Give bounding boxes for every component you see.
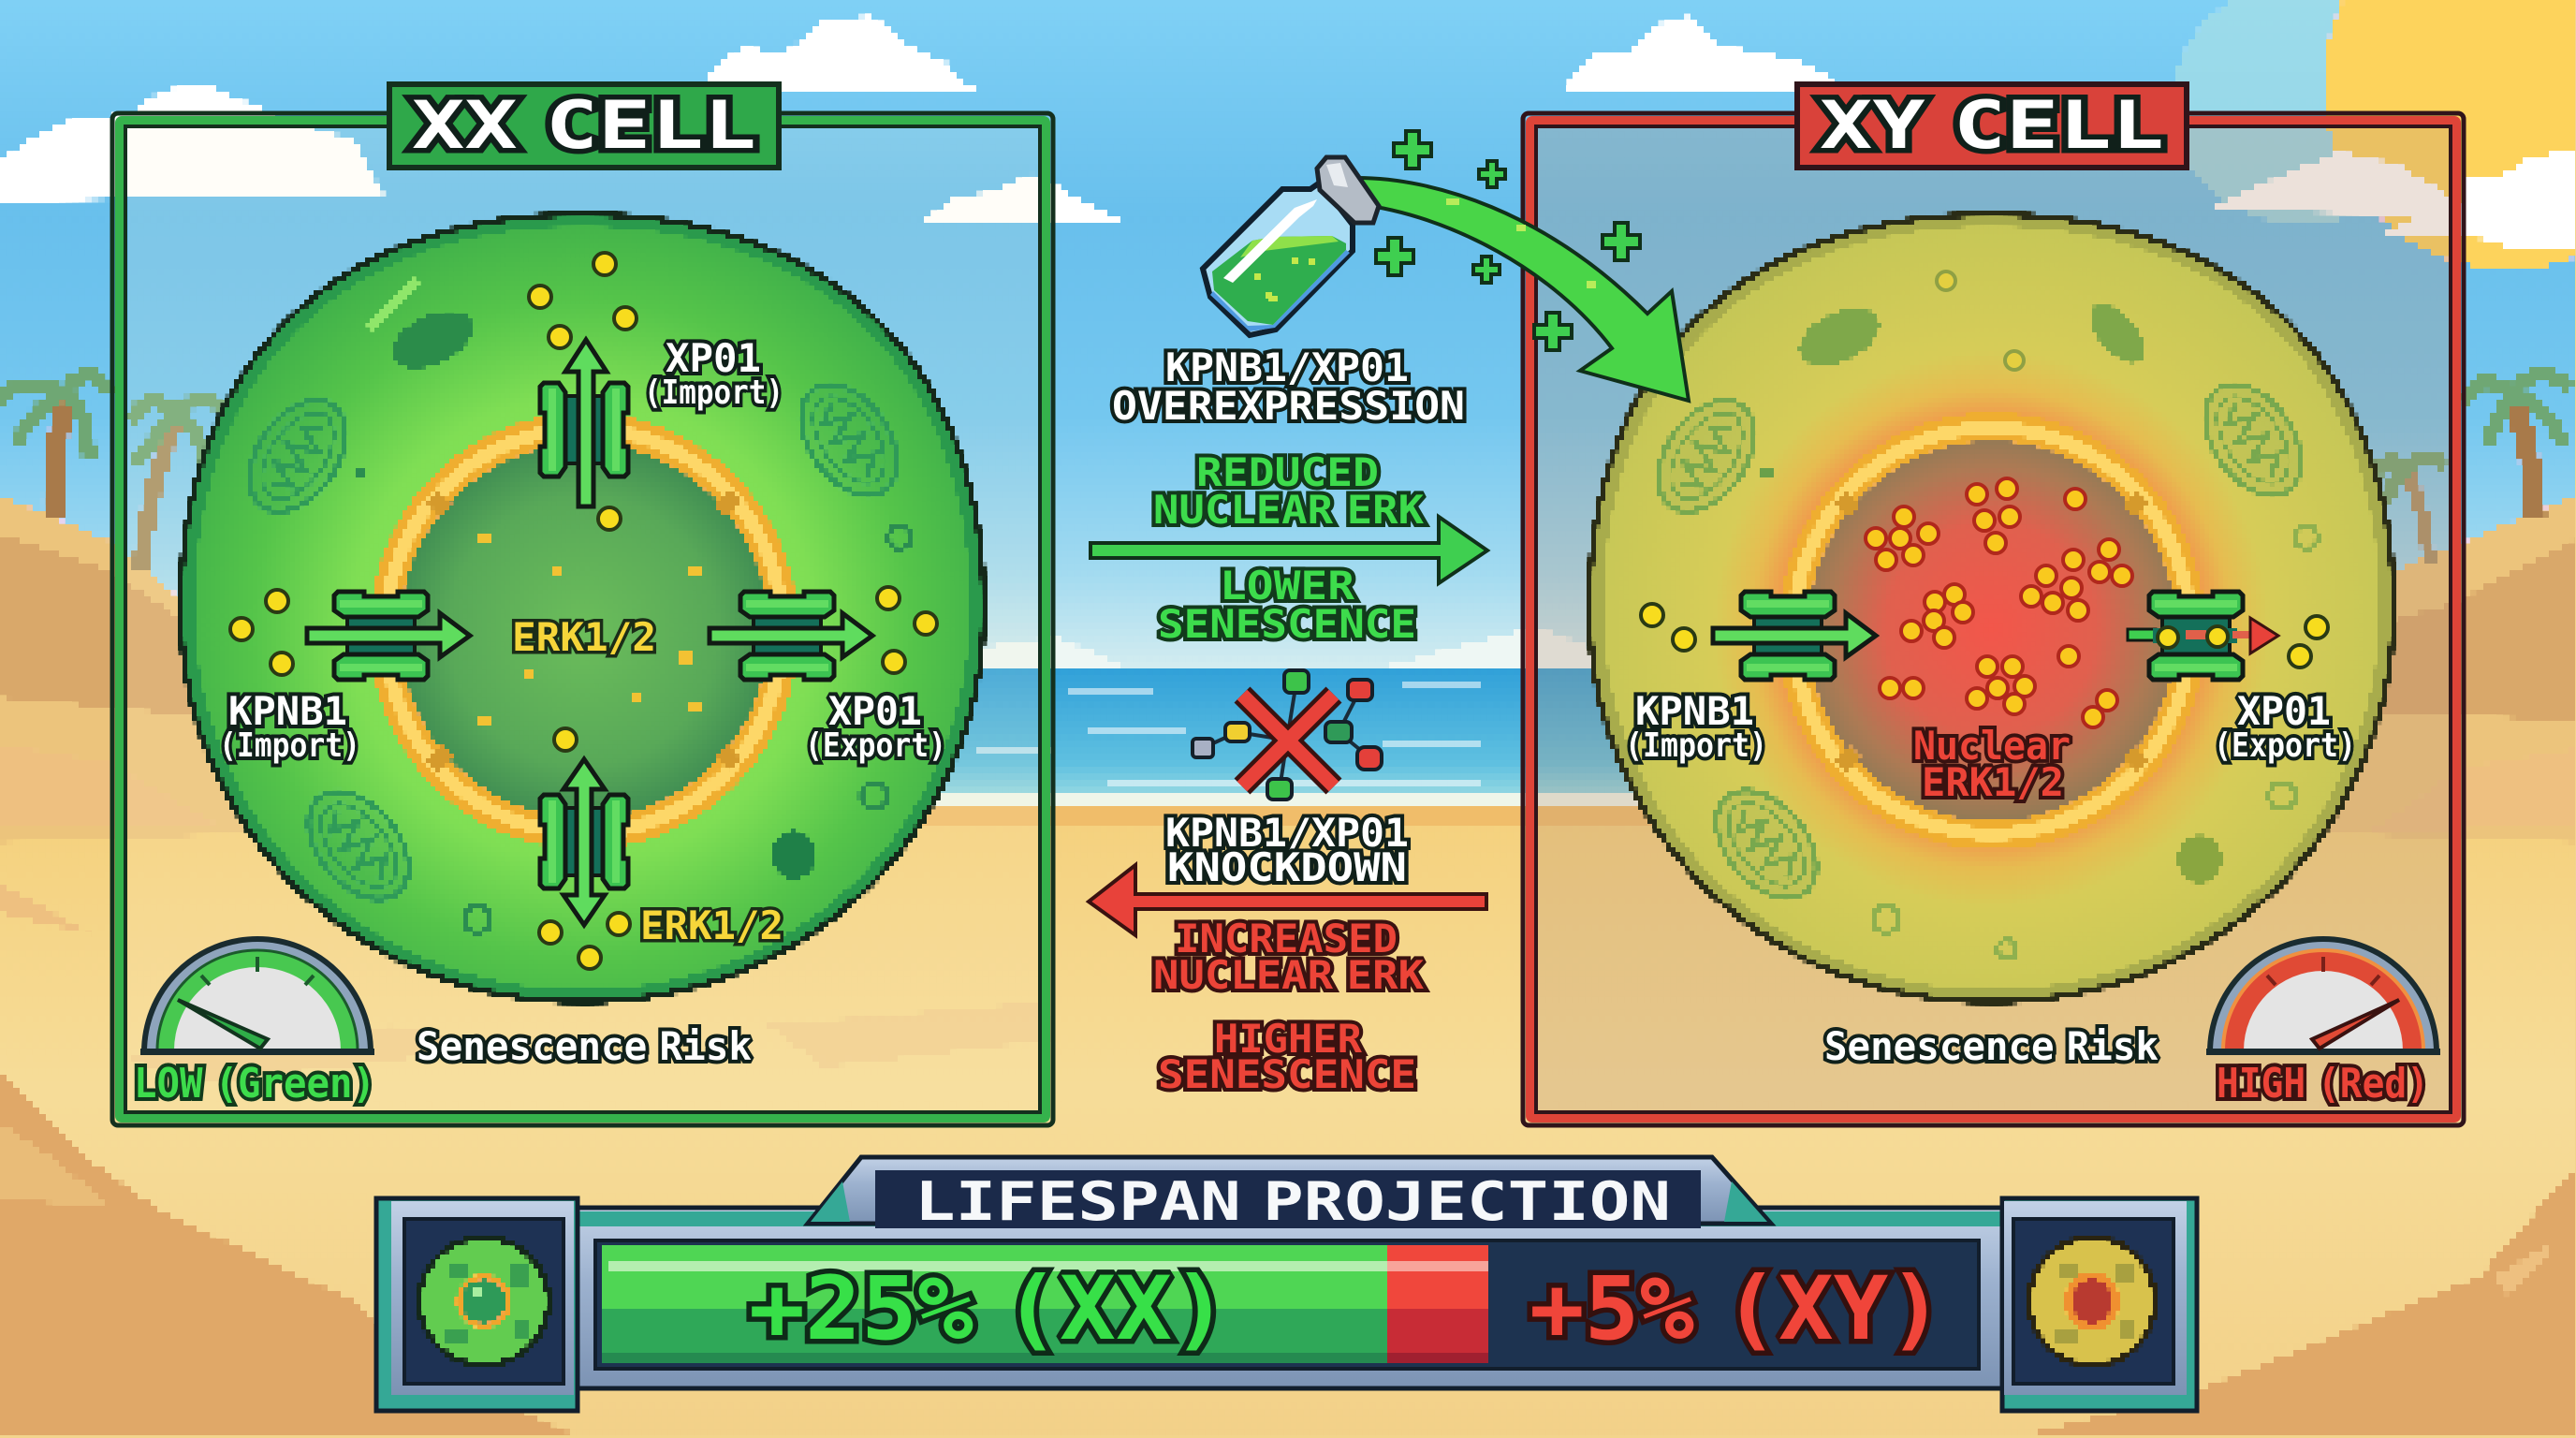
labels: XY cell: KPNB1 xyxy=(1635,688,1754,734)
channel: XP01 blocked export xyxy=(2128,592,2278,680)
heading: overexpression xyxy=(1112,345,1465,429)
title badge: XX CELL xyxy=(389,84,779,168)
icon: knockdown molecule crossed out xyxy=(1193,670,1382,800)
text: lower senescence: LOWER xyxy=(1220,563,1355,609)
icon: overexpression vial xyxy=(1203,157,1379,335)
bar track xyxy=(595,1240,1979,1369)
text: higher senescence xyxy=(1158,1016,1416,1097)
heading: overexpression: OVEREXPRESSION xyxy=(1112,383,1465,429)
title badge: XY CELL xyxy=(1797,84,2187,168)
central column: interventions xyxy=(1089,131,1689,1097)
labels: XX cell xyxy=(219,335,946,1069)
labels: XY cell: Nuclear xyxy=(1913,723,2071,769)
text: increased nuclear ERK xyxy=(1153,916,1425,998)
text: reduced nuclear ERK: NUCLEAR ERK xyxy=(1153,487,1425,533)
gauge: low senescence risk xyxy=(134,939,375,1108)
text: lower senescence xyxy=(1158,563,1416,647)
panel: lifespan projection xyxy=(376,1157,2197,1411)
icon: XY cell badge xyxy=(2013,1219,2174,1384)
value: XY lifespan: +5% (XY) xyxy=(1530,1258,1943,1360)
labels: XY cell: (Import) xyxy=(1625,726,1767,765)
text: lower senescence: SENESCENCE xyxy=(1158,601,1416,647)
arrow: red left xyxy=(1089,865,1486,935)
text: increased nuclear ERK: NUCLEAR ERK xyxy=(1153,952,1425,998)
text: higher senescence: SENESCENCE xyxy=(1158,1051,1416,1097)
labels: XX cell: Senescence Risk xyxy=(417,1023,752,1069)
gauge: high senescence risk: HIGH (Red) xyxy=(2217,1060,2429,1108)
labels: XY cell: ERK1/2 xyxy=(1922,759,2064,805)
ERK particles: XY nucleus clusters and cytoplasm xyxy=(1866,478,2132,727)
arrow: vial to XY cell xyxy=(1357,178,1689,401)
labels: XX cell: KPNB1 xyxy=(228,688,347,734)
value: XX lifespan: +25% (XX) xyxy=(749,1258,1228,1360)
channel: KPNB1 import xyxy=(1713,592,1876,680)
title badge: XX CELL: XX CELL xyxy=(412,87,756,164)
panel: XY cell xyxy=(1523,84,2464,1125)
panel frame: XY xyxy=(1523,113,2464,1125)
labels: XY cell: Senescence Risk xyxy=(1824,1023,2159,1069)
labels: XX cell: ERK1/2 xyxy=(640,902,783,948)
gauge: high senescence risk xyxy=(2206,939,2440,1108)
panel frame: XX xyxy=(112,113,1053,1125)
text: reduced nuclear ERK xyxy=(1153,449,1425,533)
nucleus: XY xyxy=(1778,413,2205,849)
labels: XY cell: (Export) xyxy=(2214,726,2356,765)
channel: KPNB1 import (left) xyxy=(307,592,470,680)
panel: XX cell xyxy=(112,84,1053,1125)
ERK particles: XY outside and in channel xyxy=(1641,271,2328,668)
nucleus: XX xyxy=(370,413,798,849)
text: reduced nuclear ERK: REDUCED xyxy=(1196,449,1379,495)
cell body: XX xyxy=(178,212,987,1005)
frame: console body xyxy=(376,1157,2197,1411)
ERK particles: XX xyxy=(230,253,937,969)
channel: bottom bidirectional xyxy=(540,759,628,925)
icon: plus signs xyxy=(1376,131,1640,350)
heading: overexpression: KPNB1/XP01 xyxy=(1165,345,1409,390)
labels: XX cell: XP01 xyxy=(666,335,761,381)
arrow: green right xyxy=(1090,517,1487,583)
bar: XX green xyxy=(602,1245,1387,1363)
labels: XX cell: (Import) xyxy=(644,374,783,412)
channel: XP01 import (top) xyxy=(540,340,628,506)
labels: XX cell: ERK1/2 xyxy=(512,614,656,660)
channel: XP01 export (right) xyxy=(710,592,872,680)
heading: knockdown: KPNB1/XP01 xyxy=(1165,810,1409,856)
labels: XX cell: (Import) xyxy=(219,726,360,765)
cell body: XY xyxy=(1587,212,2396,1005)
banner: lifespan projection: LIFESPAN PROJECTION xyxy=(915,1171,1671,1233)
icon: XX cell badge xyxy=(404,1219,564,1384)
heading: knockdown xyxy=(1165,810,1409,890)
text: increased nuclear ERK: INCREASED xyxy=(1175,916,1398,961)
labels: XY cell: XP01 xyxy=(2237,688,2331,734)
labels: XX cell: XP01 xyxy=(828,688,922,734)
labels: XX cell: (Export) xyxy=(805,726,946,765)
bar: XY red xyxy=(1387,1245,1488,1363)
heading: knockdown: KNOCKDOWN xyxy=(1167,844,1407,890)
text: higher senescence: HIGHER xyxy=(1214,1016,1363,1062)
title badge: XY CELL: XY CELL xyxy=(1820,87,2164,164)
gauge: low senescence risk: LOW (Green) xyxy=(134,1060,375,1108)
labels: XY cell xyxy=(1625,688,2356,1069)
